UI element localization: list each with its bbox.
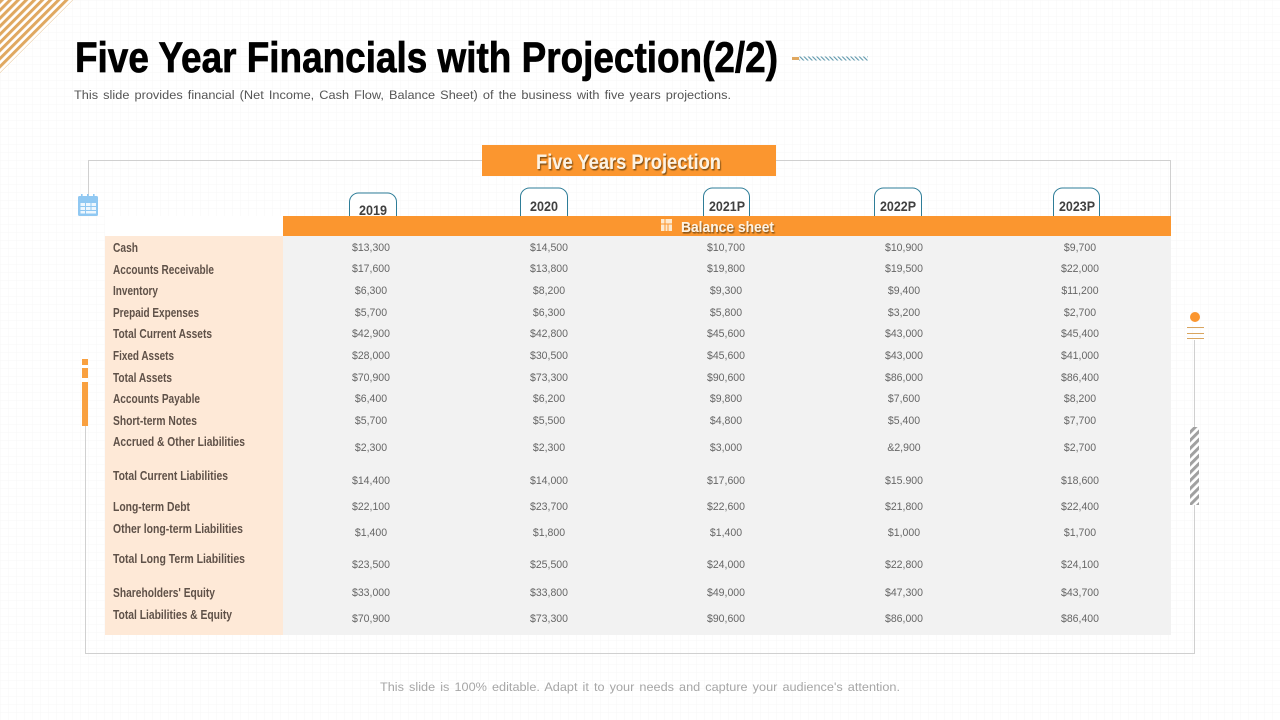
table values: $5,500 [533,415,565,427]
row labels: Fixed Assets [113,349,174,363]
tab 2019: 2019 [359,202,387,218]
table values: $73,300 [530,613,568,625]
tab 2022P [874,188,922,216]
table values: $45,400 [1061,328,1099,340]
table values: $30,500 [530,350,568,362]
table values: $86,400 [1061,372,1099,384]
table values: $70,900 [352,372,390,384]
corner stripes decoration [0,0,73,73]
table values: $43,700 [1061,587,1099,599]
table values: $15.900 [885,475,923,487]
banner: five years projection: Five Years Projection [536,151,721,174]
table values: $22,600 [707,501,745,513]
table values: $43,000 [885,328,923,340]
row labels: Total Current Assets [113,327,212,341]
table values: $24,100 [1061,559,1099,571]
table values: $43,000 [885,350,923,362]
tab 2023P: 2023P [1059,198,1095,214]
table values: $6,400 [355,393,387,405]
row labels: Prepaid Expenses [113,306,199,320]
table values: $6,300 [355,285,387,297]
table values: $5,700 [355,415,387,427]
tab 2022P: 2022P [880,198,916,214]
table values: $45,600 [707,350,745,362]
table values: $49,000 [707,587,745,599]
row labels: Inventory [113,284,158,298]
table values: $2,300 [533,442,565,454]
table values: $33,000 [352,587,390,599]
row labels: Accounts Payable [113,392,200,406]
table values: $90,600 [707,372,745,384]
table values: $19,800 [707,263,745,275]
table values: $9,700 [1064,242,1096,254]
table values: $86,400 [1061,613,1099,625]
table values: $90,600 [707,613,745,625]
table values: $22,000 [1061,263,1099,275]
table values: $19,500 [885,263,923,275]
tab 2019 [350,193,396,218]
row labels panel [105,236,283,635]
table values: $21,800 [885,501,923,513]
table values: $14,000 [530,475,568,487]
table values: $42,900 [352,328,390,340]
tab 2021P [704,188,750,216]
balance sheet header: Balance sheet [681,219,774,236]
footer note: This slide is 100% editable. Adapt it to your needs and capture your audience's attention. [380,680,900,694]
row labels: Other long-term Liabilities [113,522,243,536]
subtitle: This slide provides financial (Net Income, Cash Flow, Balance Sheet) of the business with five years projections. [74,88,731,102]
table values: $33,800 [530,587,568,599]
table values: $8,200 [533,285,565,297]
table values: $10,700 [707,242,745,254]
outer frame [86,160,1194,654]
table values: $7,600 [888,393,920,405]
table values: $3,200 [888,307,920,319]
table values: $18,600 [1061,475,1099,487]
table values: $45,600 [707,328,745,340]
table values: $1,400 [355,527,387,539]
table values: $13,300 [352,242,390,254]
table values: $9,300 [710,285,742,297]
table values: $25,500 [530,559,568,571]
table values: $28,000 [352,350,390,362]
table values: $41,000 [1061,350,1099,362]
banner: five years projection [482,145,776,176]
table values: $11,200 [1061,285,1099,297]
row labels [113,241,245,622]
table values: $13,800 [530,263,568,275]
table values: $23,700 [530,501,568,513]
table values: $22,100 [352,501,390,513]
table values: $14,500 [530,242,568,254]
table values: $47,300 [885,587,923,599]
table values: $1,000 [888,527,920,539]
table values [352,242,1099,625]
white header blank [105,216,283,236]
table values: $2,300 [355,442,387,454]
table values: $24,000 [707,559,745,571]
table values: $22,800 [885,559,923,571]
tab 2020: 2020 [530,198,558,214]
row labels: Long-term Debt [113,500,191,514]
table values: $4,800 [710,415,742,427]
tab 2023P [1054,188,1100,216]
row labels: Accounts Receivable [113,263,214,277]
icon: calendar [78,194,98,216]
row labels: Total Liabilities & Equity [113,608,232,622]
table values: $9,800 [710,393,742,405]
table values: $73,300 [530,372,568,384]
table values: $6,300 [533,307,565,319]
right hatched bar [1190,427,1199,505]
table values: $22,400 [1061,501,1099,513]
table values: $6,200 [533,393,565,405]
values panel [283,236,1171,635]
row labels: Total Current Liabilities [113,469,228,483]
year tabs [350,188,1100,218]
right accent: dot and lines [1187,312,1204,338]
table values: $1,700 [1064,527,1096,539]
table values: $86,000 [885,372,923,384]
table values: $70,900 [352,613,390,625]
tab 2020 [520,188,568,216]
row labels: Total Assets [113,371,172,385]
table values: $5,700 [355,307,387,319]
row labels: Total Long Term Liabilities [113,552,245,566]
balance sheet header [283,216,1171,236]
table values: $14,400 [352,475,390,487]
row labels: Accrued & Other Liabilities [113,435,245,449]
table values: $17,600 [707,475,745,487]
table values: $1,400 [710,527,742,539]
table values: $5,800 [710,307,742,319]
table values: $10,900 [885,242,923,254]
table values: $5,400 [888,415,920,427]
tab 2021P: 2021P [709,198,745,214]
left accent bar [82,359,88,426]
row labels: Shareholders' Equity [113,586,215,600]
table values: $86,000 [885,613,923,625]
row labels: Cash [113,241,138,255]
table values: $23,500 [352,559,390,571]
table values: $9,400 [888,285,920,297]
table values: $3,000 [710,442,742,454]
table values: $7,700 [1064,415,1096,427]
table values: $1,800 [533,527,565,539]
table values: $42,800 [530,328,568,340]
row labels: Short-term Notes [113,414,197,428]
table values: $8,200 [1064,393,1096,405]
title: Five Year Financials with Projection(2/2) [75,34,778,82]
table values: &2,900 [887,442,921,454]
table values: $17,600 [352,263,390,275]
table values: $2,700 [1064,442,1096,454]
title accent line [792,56,868,60]
table values: $2,700 [1064,307,1096,319]
